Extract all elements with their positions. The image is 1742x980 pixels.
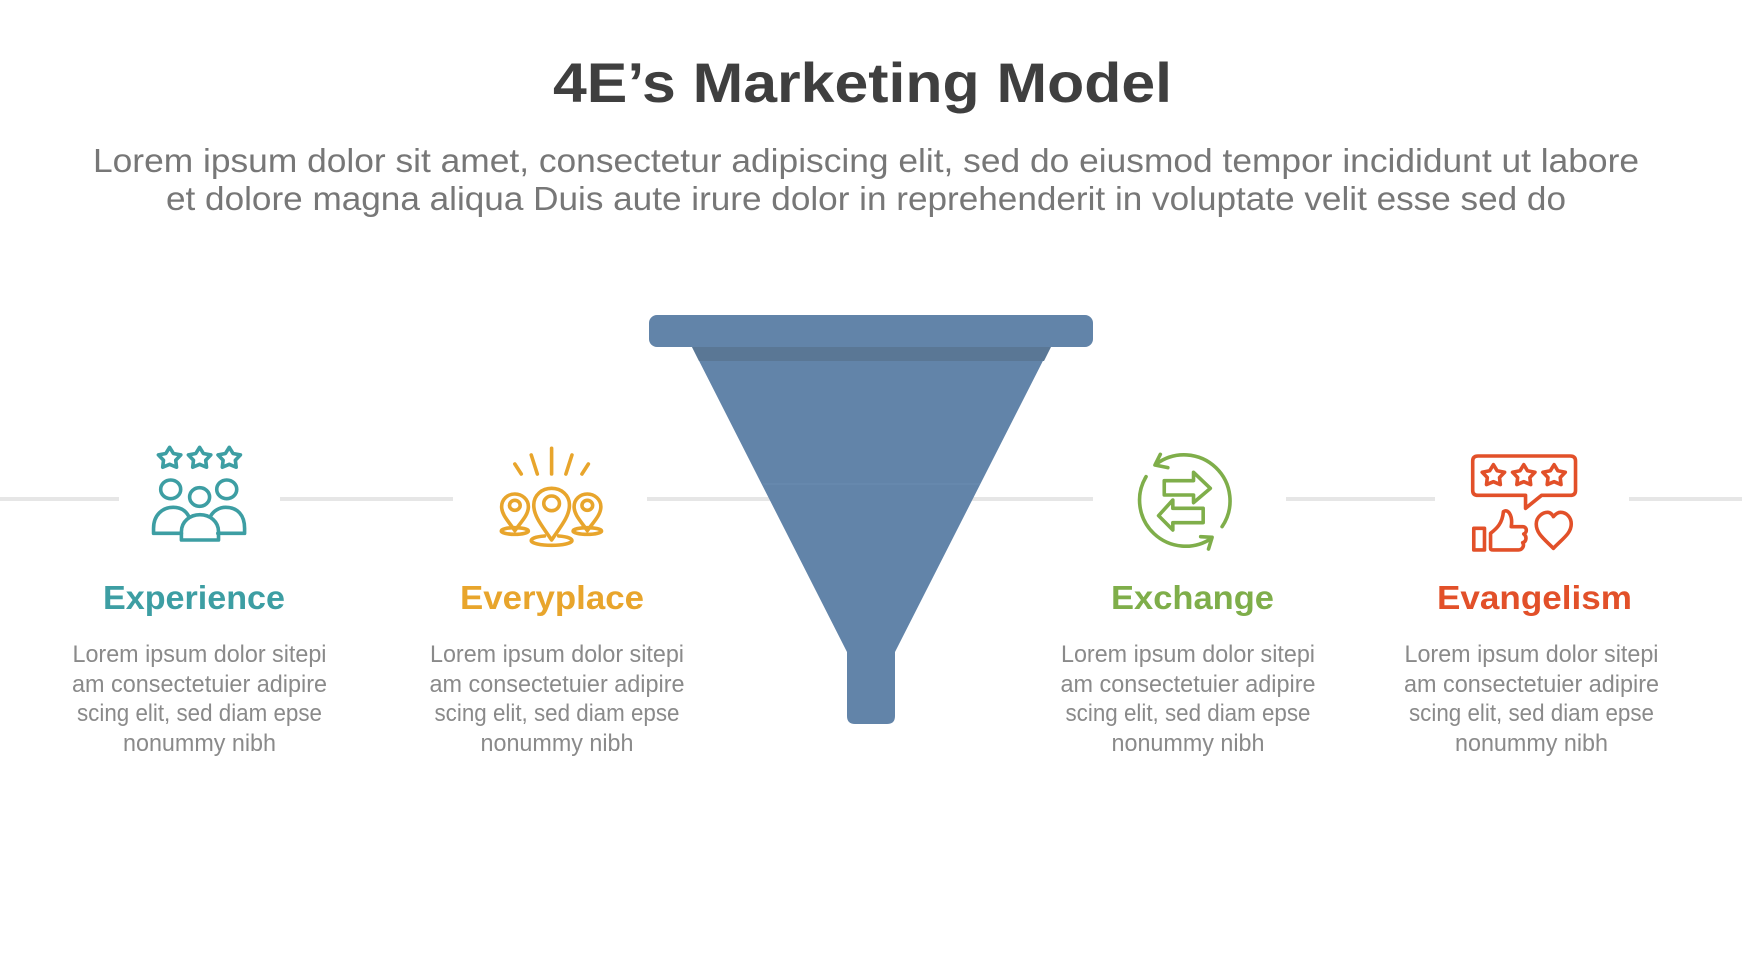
subtitle text: et dolore magna aliqua Duis aute irure dolor in reprehenderit in voluptate velit esse sed do xyxy=(166,180,1566,217)
funnel cone xyxy=(691,345,1051,716)
text block: Everyplace: Lorem ipsum dolor sitepi xyxy=(430,641,684,668)
text block: Exchange xyxy=(1060,641,1316,757)
funnel shadow band xyxy=(692,347,1051,361)
funnel spout xyxy=(847,650,895,724)
icon: experience people with stars xyxy=(154,447,245,540)
heading: Exchange: Exchange xyxy=(1111,579,1274,616)
text block: Everyplace: scing elit, sed diam epse xyxy=(434,700,680,727)
heading: Evangelism: Evangelism xyxy=(1437,579,1632,616)
text block: Everyplace xyxy=(430,641,684,757)
icon: exchange arrows in cycle xyxy=(1140,454,1230,549)
text block: Exchange: nonummy nibh xyxy=(1112,730,1264,757)
text block: Evangelism: Lorem ipsum dolor sitepi xyxy=(1404,641,1658,668)
text block: Experience: Lorem ipsum dolor sitepi xyxy=(72,641,326,668)
subtitle text: Lorem ipsum dolor sit amet, consectetur adipiscing elit, sed do eiusmod tempor incididunt ut labore xyxy=(93,142,1639,179)
heading: Everyplace: Everyplace xyxy=(460,579,644,616)
funnel xyxy=(649,315,1093,724)
text block: Evangelism: am consectetuier adipire xyxy=(1404,671,1659,698)
text block: Evangelism: scing elit, sed diam epse xyxy=(1409,700,1654,727)
text block: Exchange: scing elit, sed diam epse xyxy=(1066,700,1310,727)
title: 4E’s Marketing Model xyxy=(553,51,1172,114)
text block: Experience: nonummy nibh xyxy=(123,730,276,757)
icon: everyplace location pins xyxy=(501,448,602,545)
text block: Everyplace: am consectetuier adipire xyxy=(430,671,684,698)
text block: Evangelism: nonummy nibh xyxy=(1455,730,1608,757)
text block: Exchange: Lorem ipsum dolor sitepi xyxy=(1061,641,1315,668)
funnel rim xyxy=(649,315,1093,347)
text block: Experience: scing elit, sed diam epse xyxy=(77,700,322,727)
subtitle text xyxy=(93,142,1639,217)
text block: Evangelism xyxy=(1404,641,1659,757)
text block: Experience: am consectetuier adipire xyxy=(72,671,327,698)
text block: Experience xyxy=(72,641,327,757)
text block: Everyplace: nonummy nibh xyxy=(480,730,634,757)
heading: Experience: Experience xyxy=(103,579,285,616)
text block: Exchange: am consectetuier adipire xyxy=(1060,671,1316,698)
icon: evangelism review bubble, thumb and heart xyxy=(1473,456,1576,550)
